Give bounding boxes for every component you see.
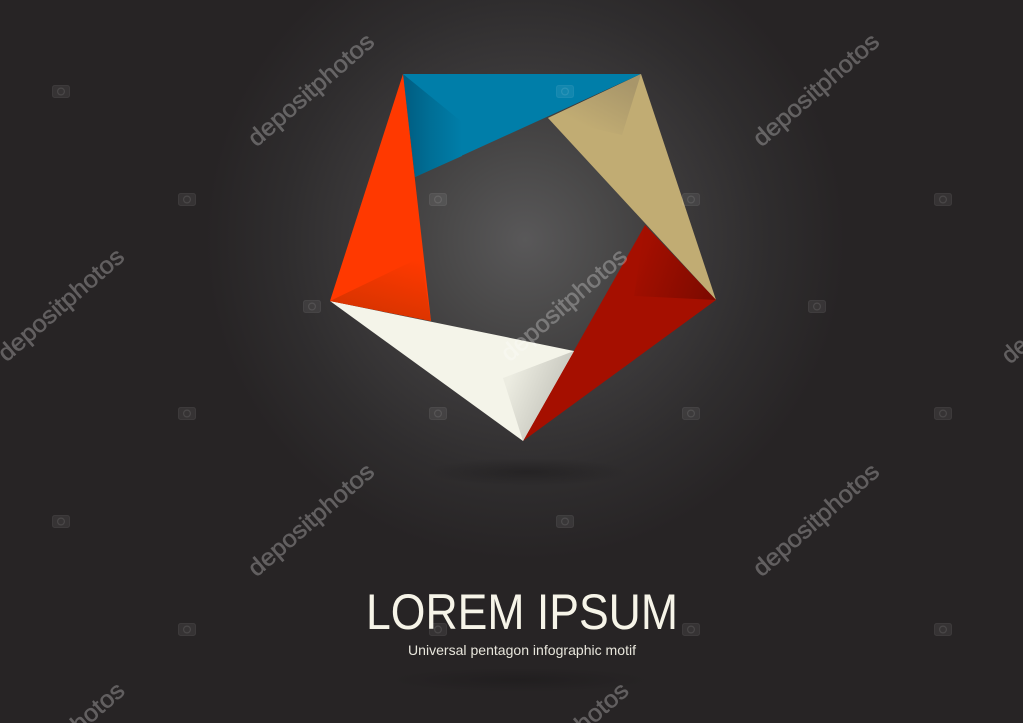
watermark text: depositphotos — [748, 458, 885, 582]
watermark camera icons — [52, 86, 952, 636]
segment: dark red — [523, 225, 716, 441]
watermark text: depositphotos — [243, 458, 380, 582]
watermark text: depositphotos — [243, 28, 380, 152]
watermark text: depositphotos — [748, 28, 885, 152]
shadow under pentagon — [428, 458, 628, 486]
subtitle: Universal pentagon infographic motif — [408, 642, 636, 658]
pentagon motif — [330, 74, 716, 441]
radial spotlight — [205, 0, 845, 560]
watermark text: depositphotos — [496, 243, 633, 367]
segment: orange — [330, 74, 431, 321]
segment: tan — [548, 74, 716, 300]
segment: blue — [403, 74, 641, 177]
shadow under subtitle — [390, 668, 650, 692]
title: LOREM IPSUM — [366, 584, 678, 640]
segment: cream — [330, 301, 574, 441]
